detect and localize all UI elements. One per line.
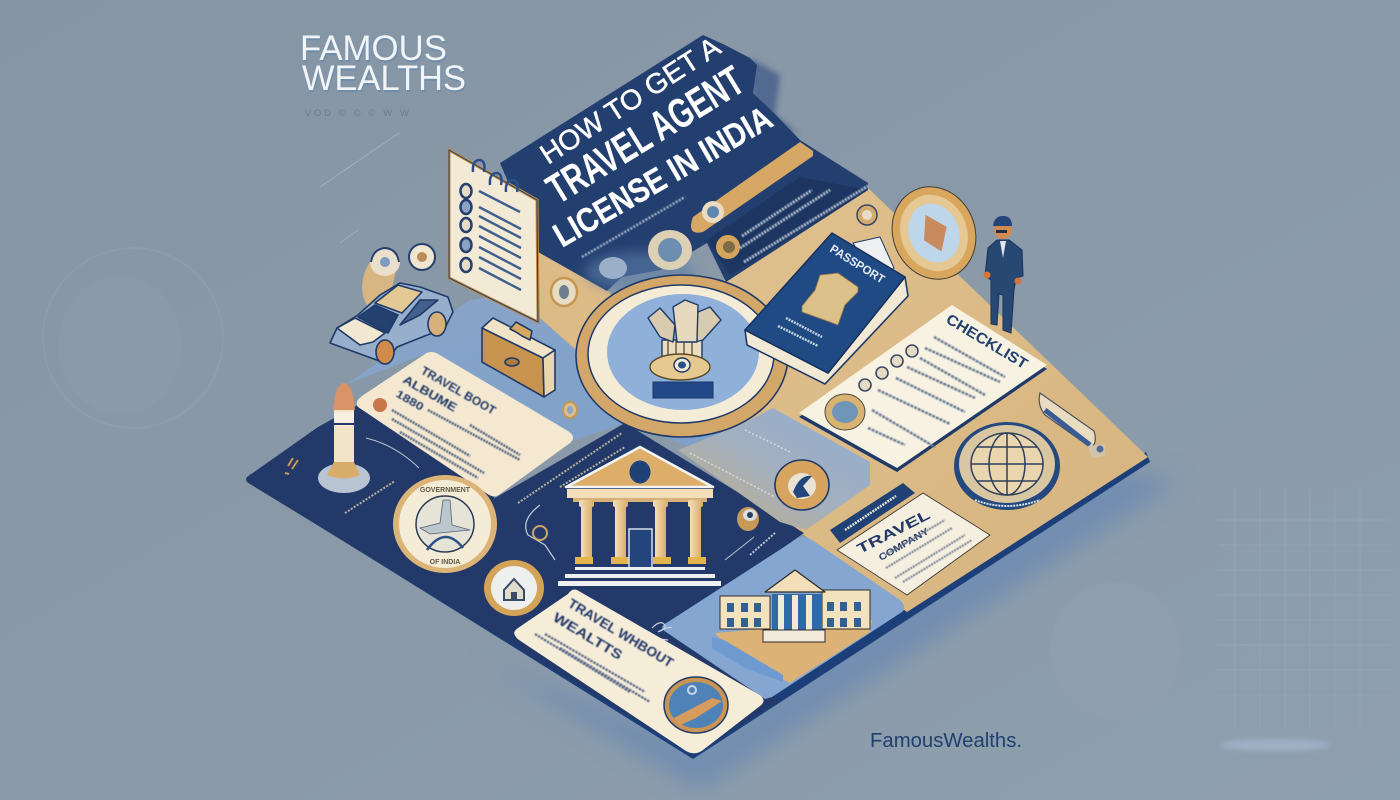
- person: travel agent: [984, 216, 1023, 333]
- title text: [534, 31, 779, 255]
- icon: hand seal: [664, 677, 728, 733]
- gold marks on navy: [285, 458, 298, 474]
- central seal ring: [576, 275, 788, 437]
- tile: tan wedge: [538, 250, 640, 350]
- orange coin: [775, 460, 829, 510]
- passport small text: [778, 318, 822, 346]
- card heading: ALBUME: [400, 372, 459, 415]
- navy plate caption lines: [345, 433, 625, 513]
- brand logo: top left: [300, 29, 467, 119]
- tile: light blue centre: [345, 280, 760, 450]
- decorative faint circle left: [43, 248, 223, 428]
- clipboard rings: [473, 160, 518, 192]
- gold seal: OF INDIA: [430, 559, 460, 566]
- title text: HOW TO GET A: [534, 31, 726, 170]
- mini card lines: [885, 520, 972, 582]
- plate edge: [247, 452, 1150, 759]
- building ground blue stripe: [712, 637, 783, 682]
- icon: car: [330, 283, 453, 364]
- bottom info card: [514, 590, 764, 753]
- travel mini card: [830, 483, 990, 595]
- bottom card heading: WEALTTS: [550, 610, 625, 663]
- card heading: 1880: [394, 388, 425, 414]
- small tan icon: [737, 507, 759, 531]
- small ring near center: [563, 402, 577, 418]
- house seal icon: [484, 560, 544, 616]
- title banner: [500, 35, 868, 291]
- brand logo: top left: FAMOUS: [300, 29, 447, 68]
- national emblem: [648, 300, 721, 380]
- passport title: PASSPORT: [827, 242, 888, 287]
- card orange dot: [373, 398, 387, 412]
- pen stand icon: [1039, 393, 1105, 458]
- title text: TRAVEL AGENT: [538, 56, 752, 213]
- emblem base: [653, 382, 713, 398]
- plate shadow: [480, 470, 1180, 790]
- bottom card lines: [535, 634, 650, 702]
- tile: navy lower left: [246, 405, 804, 755]
- brand logo: top left: WEALTHS: [303, 61, 467, 100]
- banner gold icon: [716, 235, 740, 259]
- brand logo: top left: FAMOUS: [301, 31, 448, 70]
- mini card label: [830, 483, 915, 543]
- temple column bases: [575, 557, 706, 564]
- government building: [712, 570, 872, 683]
- mini card heading: [854, 506, 933, 564]
- temple building: [558, 447, 721, 586]
- gold seal ring text: GOVERNMENT: [420, 487, 471, 494]
- navy small dashes: [750, 533, 775, 555]
- banner lens icons: [599, 230, 692, 279]
- temple door: [629, 529, 652, 567]
- small path icon on navy: [526, 505, 555, 560]
- gold bar on banner: [691, 142, 813, 233]
- decorative faint grid: [1218, 490, 1390, 730]
- checklist title: CHECKLIST: [943, 311, 1031, 373]
- temple roof: [566, 447, 713, 487]
- agent hands: [984, 272, 990, 278]
- checklist seal: [825, 394, 865, 430]
- passport: [745, 233, 908, 384]
- building ground: [715, 620, 872, 683]
- clipboard lines: [479, 191, 521, 290]
- banner small lens icon: [702, 201, 724, 223]
- passport emblem: [802, 273, 858, 325]
- title text: LICENSE IN INDIA: [547, 99, 779, 255]
- icon: briefcase: [482, 318, 555, 397]
- icon: map bubble behind car: [362, 244, 435, 307]
- agent suit: [985, 240, 1023, 333]
- title banner shadow: [750, 58, 800, 135]
- mini card heading: COMPANY: [877, 526, 932, 564]
- tile: light blue bottom: [662, 537, 904, 699]
- main isometric plate: [246, 35, 1150, 759]
- mini card heading: TRAVEL: [854, 506, 933, 557]
- brand tagline: VOD © © © W W: [305, 108, 409, 119]
- card text lines: [392, 410, 520, 478]
- brand logo: top left: WEALTHS: [302, 59, 466, 98]
- decorative faint circle right: [1050, 582, 1180, 718]
- icon: small ring: [551, 278, 577, 306]
- gold coin: [878, 174, 990, 292]
- checklist card: [799, 305, 1047, 472]
- banner stripe text lines: [740, 186, 868, 262]
- bottom card heading: TRAVEL WHBOUT: [565, 596, 677, 671]
- globe seal: [954, 422, 1060, 510]
- clipboard checklist: [449, 150, 538, 322]
- checklist circles: [859, 345, 918, 391]
- left info card: [357, 352, 573, 496]
- banner dark stripe: [707, 177, 868, 275]
- banner soft glow: [585, 252, 695, 292]
- temple columns: [579, 500, 703, 557]
- banner caption lines: [582, 197, 685, 257]
- rocket monument: [318, 383, 370, 493]
- footer brand: FamousWealths.: [870, 730, 1022, 752]
- temple steps: [558, 567, 721, 586]
- temple beam: [567, 489, 713, 498]
- small ring icon: [857, 205, 877, 225]
- passport cover: [745, 233, 905, 373]
- small script mark: [650, 623, 672, 640]
- building portico: [772, 594, 822, 630]
- clipboard check circles: [460, 184, 472, 272]
- building windows: [727, 602, 861, 627]
- agent head: [994, 221, 1012, 239]
- navy thin lines: [366, 438, 754, 560]
- tile: blue-grey strip: [678, 408, 870, 530]
- passport pages: [745, 277, 908, 384]
- building wings: [720, 596, 770, 629]
- footer pale glow: [1220, 739, 1330, 751]
- gold seal: [393, 475, 497, 573]
- card heading: TRAVEL BOOT: [418, 363, 499, 418]
- checklist lines: [868, 337, 1005, 447]
- passport loose pages: [853, 237, 894, 280]
- tile: tan ground: [700, 188, 1148, 612]
- blue strip lines: [690, 430, 790, 497]
- decorative sparkle lines: [320, 133, 399, 243]
